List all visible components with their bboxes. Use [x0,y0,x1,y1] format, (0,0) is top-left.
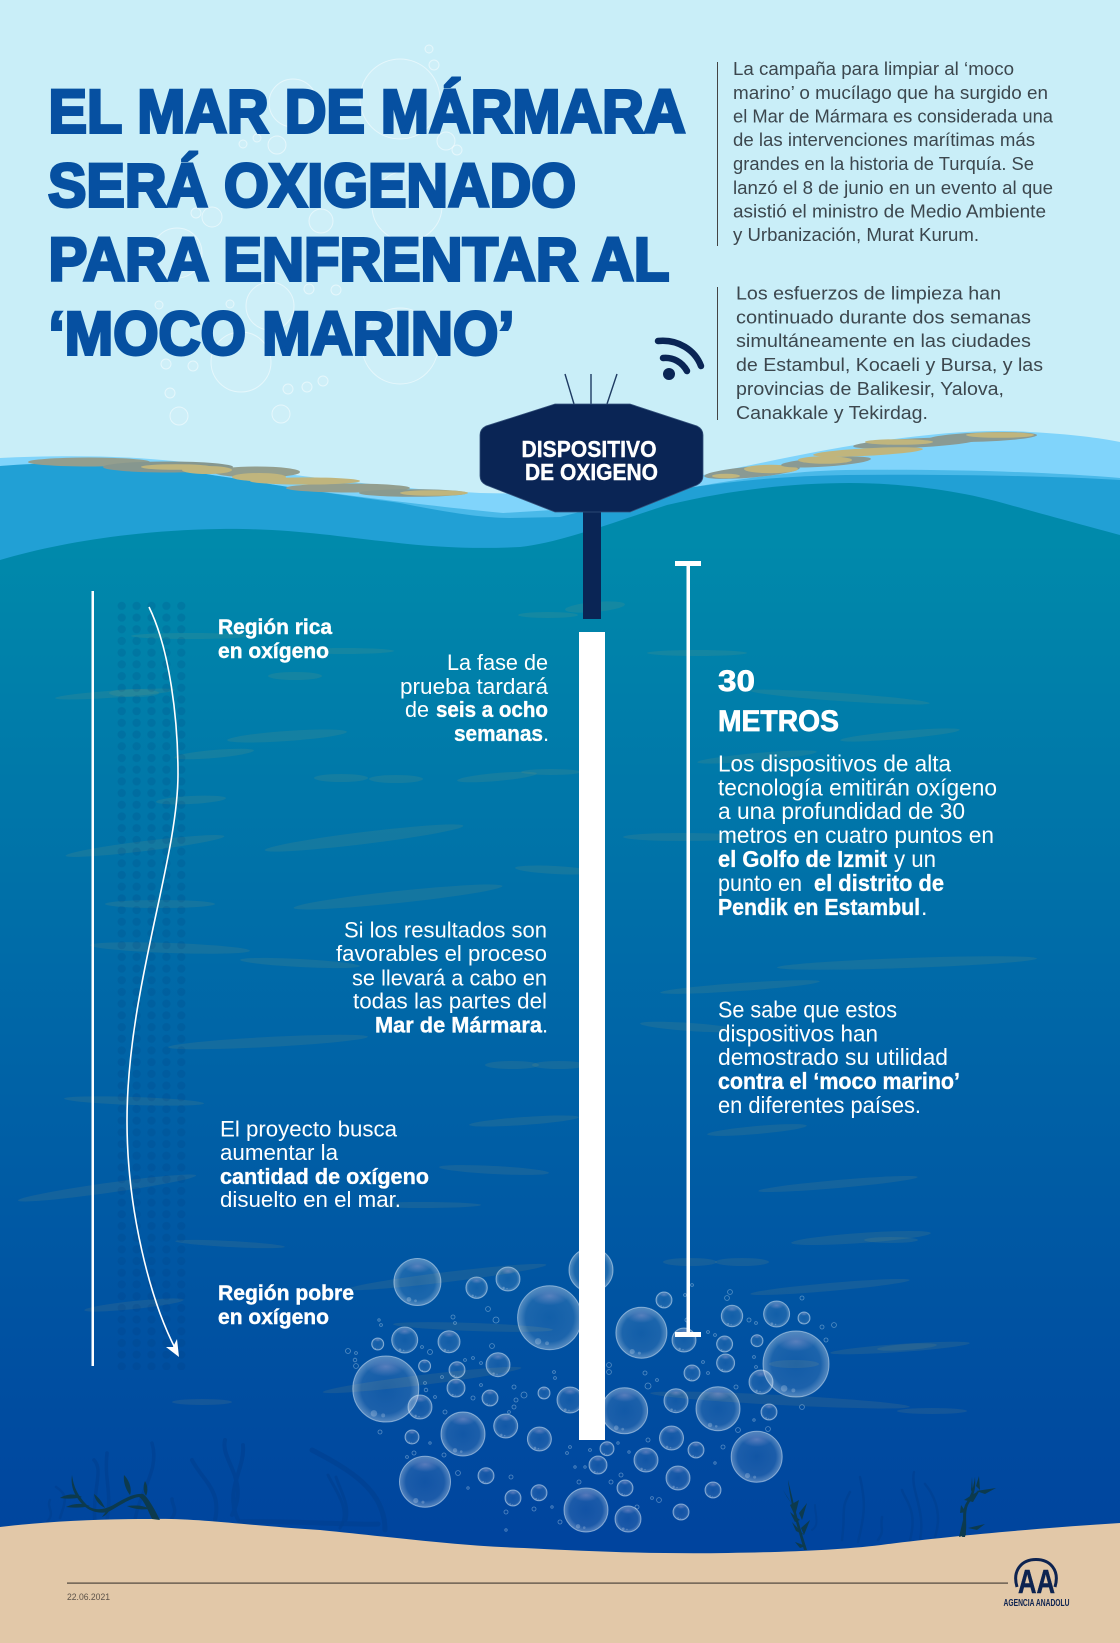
logo: Agencia Anadolu: AA [1018,1563,1055,1600]
intro paragraph one: y Urbanización, Murat Kurum. [733,224,979,245]
text: proven utility: demostrado su utilidad [718,1044,948,1070]
intro paragraph one: el Mar de Mármara es considerada una [733,106,1054,127]
text: favourable results: se llevará a cabo en [352,966,547,990]
intro paragraph two: continuado durante dos semanas [736,306,1031,328]
label: oxygen poor region: Región pobre [218,1282,354,1305]
decorative air bubbles [152,45,462,425]
title: EL MAR DE MÁRMARA [48,78,686,146]
icon: wifi signal [658,341,701,380]
text: high tech devices [718,751,997,920]
oxygen device: DE OXIGENO [525,459,658,485]
device stem [583,510,601,619]
sandy seabed [0,1519,1120,1643]
oxygen bubbles cloud [353,1248,829,1532]
intro paragraph two: de Estambul, Kocaeli y Bursa, y las [736,354,1043,375]
device antennas [565,374,617,404]
footer rule [67,1582,1008,1584]
oxygen device [480,404,703,512]
tiny oxygen bubbles [346,1284,836,1531]
text: high tech devices: el distrito de [814,870,944,896]
intro paragraph one: lanzó el 8 de junio en un evento al que [733,177,1053,198]
green seaweed [60,1475,996,1550]
text: high tech devices: y un [894,846,936,872]
text: project aim: cantidad de oxígeno [220,1164,429,1189]
title: SERÁ OXIGENADO [48,152,576,220]
intro paragraph two: simultáneamente en las ciudades [736,330,1031,351]
surface mucilage right [704,431,1037,482]
text: favourable results [336,918,548,1037]
intro paragraph one: marino’ o mucílago que ha surgido en [733,82,1048,103]
intro paragraph two: Los esfuerzos de limpieza han [736,282,1001,304]
sea surface layers [0,431,1120,1560]
text: proven utility [718,997,960,1118]
left depth line [92,591,94,1366]
text: high tech devices: punto en [718,870,802,896]
surface mucilage left [28,458,468,497]
text: test phase: . [543,721,549,746]
intro paragraph one: de las intervenciones marítimas más [733,129,1035,150]
text: favourable results: . [542,1012,548,1037]
intro paragraph one: grandes en la historia de Turquía. Se [733,153,1034,174]
date: 22.06.2021 [67,1592,110,1602]
intro paragraph two: provincias de Balikesir, Yalova, [736,378,1004,399]
text: project aim [220,1116,429,1212]
depth scale label: METROS [718,705,839,738]
background seaweed silhouettes [47,1440,938,1542]
text: test phase: de [405,697,429,722]
intro paragraph two [717,282,1043,423]
title: ‘MOCO MARINO’ [48,300,514,368]
text: test phase [400,650,549,746]
intro paragraph one: La campaña para limpiar al ‘moco [733,58,1014,79]
text: high tech devices: a una profundidad de 30 [718,798,965,824]
text: test phase: prueba tardará [400,674,549,699]
text: proven utility: contra el ‘moco marino’ [718,1068,960,1094]
text: high tech devices: metros en cuatro puntos en [718,822,994,848]
label: oxygen rich region [218,616,332,663]
text: favourable results: favorables el proceso [336,941,547,966]
label: oxygen poor region: en oxígeno [218,1306,329,1329]
text: test phase: semanas [454,721,543,746]
text: high tech devices: . [921,894,927,920]
text: project aim: aumentar la [220,1140,339,1165]
text: high tech devices: Pendik en Estambul [718,894,920,920]
text: test phase: seis a ocho [436,697,548,722]
text: project aim: El proyecto busca [220,1116,398,1142]
text: favourable results: todas las partes del [353,988,547,1014]
text: high tech devices: tecnología emitirán oxígeno [718,775,997,801]
text: favourable results: Mar de Mármara [375,1012,543,1037]
text: favourable results: Si los resultados son [344,918,547,942]
text: proven utility: Se sabe que estos [718,997,897,1023]
label: oxygen poor region [218,1282,354,1329]
text: high tech devices: Los dispositivos de alta [718,751,951,777]
logo: Agencia Anadolu [1004,1560,1070,1609]
text: proven utility: dispositivos han [718,1021,878,1047]
title: PARA ENFRENTAR AL [48,226,670,294]
text: test phase: La fase de [447,650,548,675]
intro paragraph one: asistió el ministro de Medio Ambiente [733,200,1046,222]
oxygen dot column [114,600,189,1370]
submerged mucilage wisps [17,599,1037,1414]
text: proven utility: en diferentes países. [718,1092,921,1118]
oxygen curve arrow [127,607,179,1357]
white emission pipe [579,632,605,1440]
depth scale [675,561,701,1337]
text: high tech devices: el Golfo de Izmit [718,846,887,872]
intro paragraph one [717,58,1054,246]
label: oxygen rich region: Región rica [218,616,332,639]
depth scale label [718,665,839,738]
label: oxygen rich region: en oxígeno [218,640,329,663]
sky background [0,0,1120,640]
oxygen device: DISPOSITIVO [522,436,656,462]
text: project aim: disuelto en el mar. [220,1187,401,1212]
logo: Agencia Anadolu: AGENCIA ANADOLU [1004,1597,1070,1609]
title [48,78,686,368]
intro paragraph two: Canakkale y Tekirdag. [736,402,928,423]
depth scale label: 30 [718,665,755,698]
